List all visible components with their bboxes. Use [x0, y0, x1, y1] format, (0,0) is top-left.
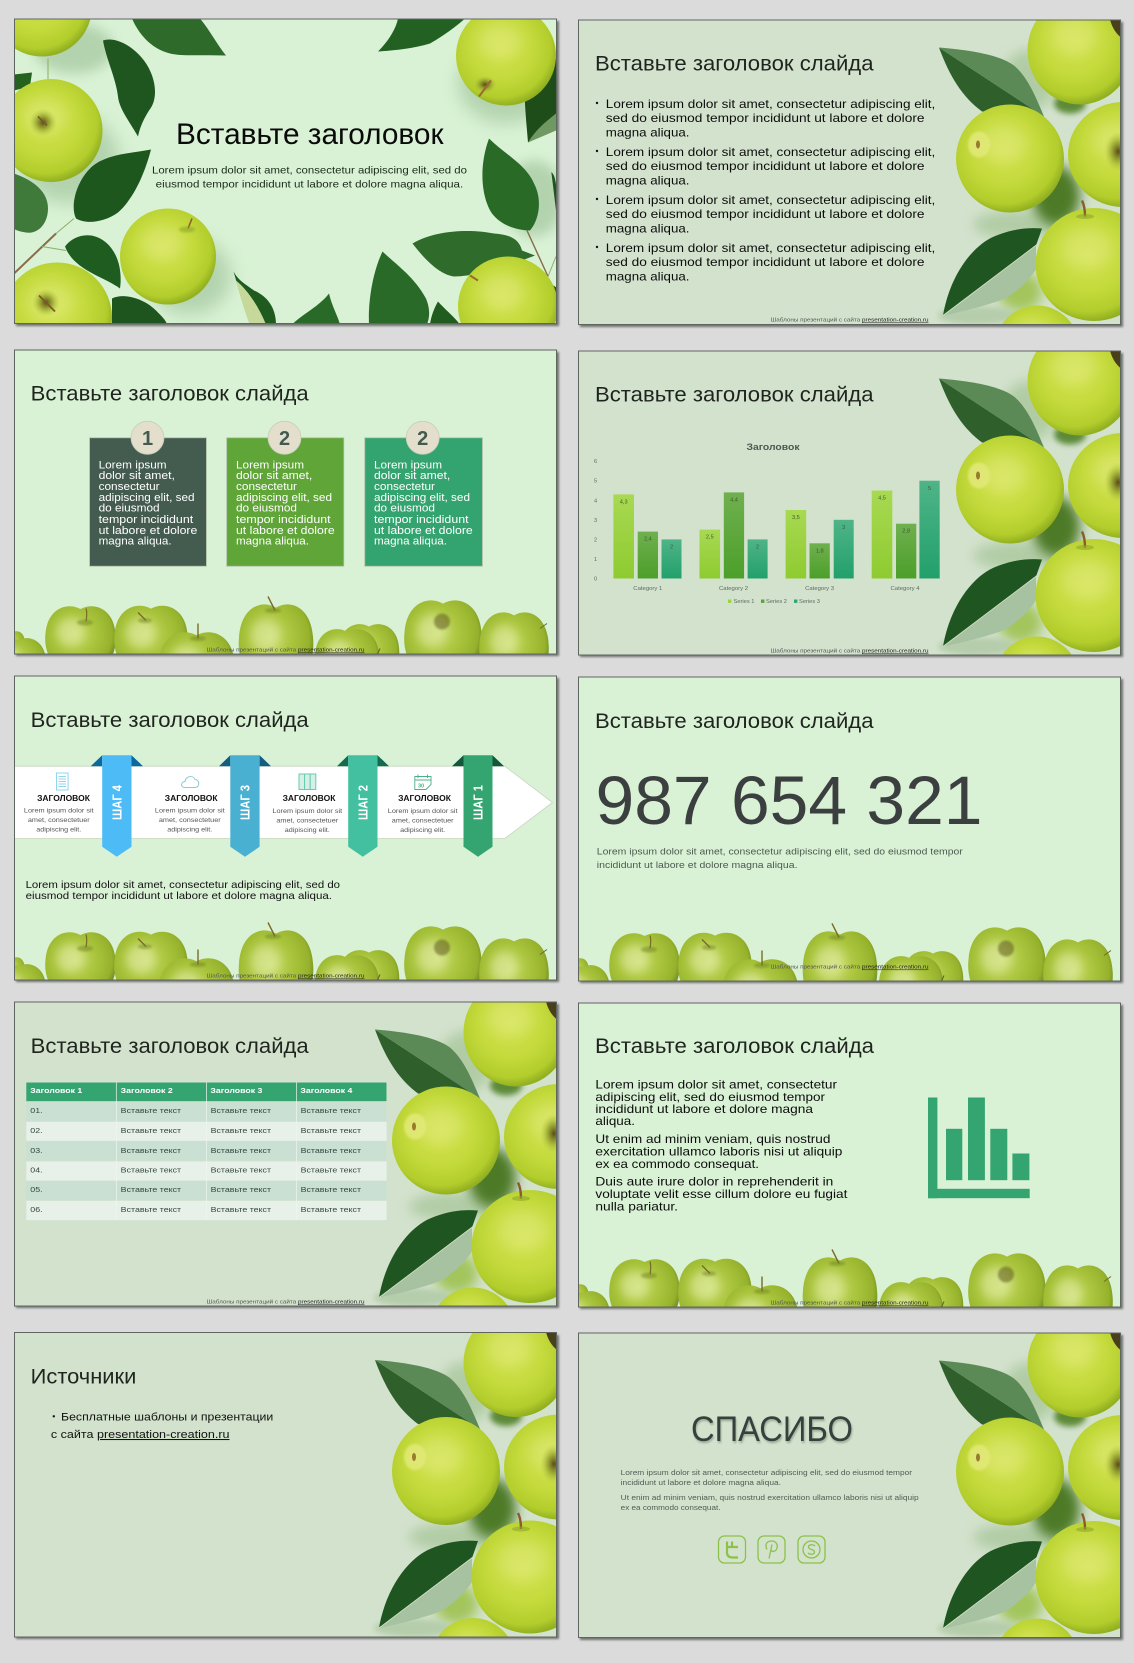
paragraph	[621, 1468, 919, 1512]
step text 3: Lorem ipsum dolor sit	[155, 808, 225, 814]
body text: Lorem ipsum dolor sit amet, consectetur	[595, 1078, 837, 1092]
step text 3: amet, consectetuer	[159, 817, 221, 824]
y axis labels	[594, 459, 597, 582]
title: Вставьте заголовок слайда	[31, 1034, 309, 1058]
paragraph	[597, 847, 964, 871]
bullet list: sed do eiusmod tempor incididunt ut labore et dolore	[606, 159, 925, 173]
source list: Бесплатные шаблоны и презентации	[61, 1411, 273, 1423]
body text: voluptate velit esse cillum dolore eu fugiat	[595, 1187, 848, 1201]
photo: row of apples	[554, 1250, 1113, 1360]
body text: exercitation ullamco laboris nisi ut aliquip	[595, 1144, 843, 1158]
source list: с сайта presentation-creation.ru	[51, 1429, 230, 1441]
table body: 05.	[30, 1185, 43, 1194]
photo: apples and leaves	[374, 978, 614, 1372]
bullet list: magna aliqua.	[606, 125, 689, 139]
step text 1: Lorem ipsum dolor sit	[388, 808, 458, 815]
card 1: do eiusmod	[99, 502, 160, 514]
photo: row of apples	[0, 922, 549, 1034]
step text 4: adipiscing elit.	[36, 826, 82, 834]
subtitle text: eiusmod tempor incididunt ut labore et dolore magna aliqua.	[156, 180, 463, 190]
card 1: magna aliqua.	[99, 536, 172, 548]
table body: Вставьте текст	[121, 1205, 182, 1214]
body text: Duis aute irure dolor in reprehenderit in	[595, 1174, 833, 1188]
footer credit	[206, 646, 364, 654]
paragraph: Lorem ipsum dolor sit amet, consectetur adipiscing elit, sed do eiusmod tempor	[597, 847, 964, 858]
table body: Вставьте текст	[121, 1146, 182, 1155]
ribbon: step 3	[219, 755, 271, 857]
title: Вставьте заголовок	[176, 118, 445, 151]
data labels: 1,8	[816, 548, 824, 554]
card 1: consectetur	[99, 481, 160, 493]
card 2: magna aliqua.	[236, 536, 309, 548]
data labels	[620, 486, 931, 554]
footer credit	[770, 648, 928, 654]
photo: row of apples	[0, 596, 549, 708]
table body: Вставьте текст	[211, 1185, 272, 1194]
legend: Series 3	[799, 599, 820, 605]
bullet list: Lorem ipsum dolor sit amet, consectetur adipiscing elit,	[606, 241, 935, 255]
data labels: 2	[756, 544, 759, 550]
title: Вставьте заголовок слайда	[595, 52, 874, 76]
y axis labels: 1	[594, 557, 597, 563]
bullet list: Lorem ipsum dolor sit amet, consectetur adipiscing elit,	[606, 145, 935, 159]
bullet list: magna aliqua.	[606, 173, 689, 187]
footer credit	[206, 1298, 364, 1306]
footer credit	[770, 1300, 928, 1306]
table header: Заголовок 2	[121, 1086, 173, 1095]
table body: Вставьте текст	[211, 1166, 272, 1174]
step text 2: ЗАГОЛОВОК	[283, 794, 336, 803]
icon: pinterest	[758, 1536, 785, 1563]
card 1: dolor sit amet,	[99, 470, 175, 482]
icon: twitter	[718, 1536, 746, 1563]
card 1: 1	[142, 428, 153, 450]
step text 1: adipiscing elit.	[400, 827, 446, 834]
table body: 01.	[30, 1106, 43, 1115]
card 3: dolor sit amet,	[374, 470, 450, 482]
panel: big number slide	[578, 676, 1121, 982]
paragraph: ex ea commodo consequat.	[621, 1503, 721, 1512]
data labels: 4,3	[620, 500, 628, 506]
bullet list: Lorem ipsum dolor sit amet, consectetur adipiscing elit,	[606, 193, 935, 207]
ribbon: step 4: ШАГ 4	[110, 784, 124, 820]
icon: document	[56, 773, 68, 790]
body text: incididunt ut labore et dolore magna	[595, 1102, 813, 1116]
card 2: consectetur	[236, 481, 297, 493]
step text 4	[24, 794, 94, 834]
photo: row of apples	[554, 924, 1113, 1034]
data labels: 2	[670, 544, 673, 550]
panel: bar chart slide	[578, 350, 1121, 656]
photo: apples and leaves	[374, 1309, 614, 1663]
caption text: eiusmod tempor incididunt ut labore et dolore magna aliqua.	[26, 891, 332, 902]
table body: Вставьте текст	[301, 1185, 362, 1194]
step text 3: ЗАГОЛОВОК	[165, 794, 219, 803]
table body: Вставьте текст	[121, 1126, 182, 1135]
footer credit	[206, 972, 364, 980]
table body: Вставьте текст	[301, 1146, 362, 1155]
subtitle text: Lorem ipsum dolor sit amet, consectetur adipiscing elit, sed do	[152, 166, 467, 176]
photo: apples and leaves	[938, 1310, 1134, 1663]
category labels	[633, 586, 920, 592]
icon: calendar: 30	[418, 784, 424, 790]
caption text	[26, 880, 340, 902]
caption text: Lorem ipsum dolor sit amet, consectetur adipiscing elit, sed do	[26, 880, 340, 891]
series 3 bars	[662, 481, 940, 578]
ribbon: step 1: ШАГ 1	[470, 785, 486, 820]
card 2: do eiusmod	[236, 502, 297, 514]
table body	[30, 1106, 362, 1214]
panel: thank you slide	[578, 1332, 1121, 1638]
card 3: 2	[417, 428, 428, 450]
table body: Вставьте текст	[121, 1106, 182, 1115]
body text: Ut enim ad minim veniam, quis nostrud	[595, 1132, 830, 1146]
table body: Вставьте текст	[301, 1106, 362, 1115]
body text: adipiscing elit, sed do eiusmod tempor	[595, 1090, 825, 1104]
ribbon: step 3: ШАГ 3	[238, 785, 252, 820]
card 3: ut labore et dolore	[374, 525, 473, 537]
table body: Вставьте текст	[301, 1166, 362, 1174]
y axis labels: 3	[594, 518, 597, 524]
table body: 02.	[30, 1126, 43, 1135]
data labels: 3	[842, 525, 845, 531]
ribbon: step 2: ШАГ 2	[356, 785, 370, 820]
body text	[595, 1078, 848, 1214]
panel: three cards slide	[14, 350, 557, 654]
card 2: Lorem ipsum	[236, 460, 304, 472]
card 3: magna aliqua.	[374, 536, 447, 548]
footer credit	[770, 964, 928, 970]
table body: Вставьте текст	[301, 1205, 362, 1214]
y axis labels: 2	[594, 537, 597, 543]
category labels: Category 2	[719, 586, 748, 592]
footer credit	[770, 316, 928, 324]
legend: Series 2	[766, 599, 787, 605]
step text 2: Lorem ipsum dolor sit	[272, 808, 343, 815]
icon: cloud	[182, 777, 199, 788]
body text: nulla pariatur.	[595, 1200, 678, 1214]
table header: Заголовок 1	[30, 1086, 83, 1095]
step text 3: adipiscing elit.	[167, 826, 213, 834]
series 2 bars	[638, 492, 916, 578]
card 2: adipiscing elit, sed	[236, 492, 332, 504]
table body: Вставьте текст	[211, 1146, 272, 1155]
table header: Заголовок 4	[300, 1086, 353, 1095]
card 2: dolor sit amet,	[236, 470, 312, 482]
y axis labels: 6	[594, 459, 597, 465]
step text 2: amet, consectetuer	[276, 818, 338, 824]
bullet list	[596, 97, 935, 283]
body text: ex ea commodo consequat.	[595, 1157, 759, 1171]
chart title: Заголовок	[746, 442, 800, 452]
photo: apples and leaves	[938, 0, 1134, 389]
step text 2	[272, 794, 343, 834]
table header: Заголовок 3	[210, 1086, 262, 1095]
data labels: 4,4	[730, 498, 738, 504]
panel: table slide	[14, 1002, 557, 1306]
paragraph: Ut enim ad minim veniam, quis nostrud exercitation ullamco laboris nisi ut aliquip	[621, 1493, 919, 1502]
subtitle text	[152, 166, 467, 190]
data labels: 2,4	[644, 536, 652, 542]
arrow band	[14, 766, 552, 838]
table body: Вставьте текст	[211, 1205, 272, 1214]
icon: skype	[798, 1536, 825, 1563]
card 1: Lorem ipsum	[99, 460, 167, 472]
icon: calendar	[415, 774, 431, 790]
bar chart	[594, 442, 940, 605]
card 2: tempor incididunt	[236, 514, 331, 526]
card 2: 2	[279, 428, 290, 450]
data labels: 4,5	[878, 496, 886, 502]
card 3	[365, 421, 482, 566]
heading: СПАСИБО	[691, 1409, 853, 1449]
paragraph: incididunt ut labore et dolore magna aliqua.	[621, 1478, 781, 1487]
big number: 987 654 321	[596, 762, 983, 839]
icon: bar chart	[928, 1098, 1030, 1198]
step text 1	[388, 794, 458, 834]
y axis labels: 0	[594, 576, 597, 582]
step text 4: amet, consectetuer	[28, 817, 90, 824]
y axis labels: 5	[594, 479, 597, 485]
source list	[51, 1411, 273, 1441]
bullet list: sed do eiusmod tempor incididunt ut labore et dolore	[606, 255, 925, 269]
ribbon: step 1	[452, 755, 504, 857]
step text 4: Lorem ipsum dolor sit	[24, 808, 94, 814]
table body: 04.	[30, 1166, 43, 1174]
step text 1: amet, consectetuer	[392, 818, 454, 824]
title: Вставьте заголовок слайда	[31, 708, 309, 732]
card 3: tempor incididunt	[374, 514, 469, 526]
data labels: 2,8	[902, 528, 910, 534]
legend	[728, 599, 820, 605]
table body: 06.	[30, 1205, 43, 1214]
body text: aliqua.	[595, 1114, 635, 1128]
table header	[30, 1086, 353, 1095]
category labels: Category 4	[890, 586, 920, 592]
card 3: do eiusmod	[374, 502, 435, 514]
paragraph: incididunt ut labore et dolore magna aliqua.	[597, 860, 797, 871]
panel: text and icon slide	[578, 1002, 1121, 1308]
bullet list: Lorem ipsum dolor sit amet, consectetur adipiscing elit,	[606, 97, 935, 111]
series 1 bars	[613, 490, 892, 578]
card 3: adipiscing elit, sed	[374, 492, 470, 504]
photo: apples and leaves	[938, 328, 1134, 720]
table body: Вставьте текст	[211, 1126, 272, 1135]
bullet list: sed do eiusmod tempor incididunt ut labore et dolore	[606, 111, 925, 125]
step text 2: adipiscing elit.	[285, 827, 330, 834]
panel: sources slide	[14, 1332, 557, 1638]
category labels: Category 3	[805, 586, 834, 592]
step text 3	[155, 794, 225, 834]
bullet list: magna aliqua.	[606, 269, 689, 283]
ribbon: step 4	[91, 755, 143, 857]
card 3: Lorem ipsum	[374, 460, 442, 472]
step text 1: ЗАГОЛОВОК	[398, 794, 452, 803]
card 1: adipiscing elit, sed	[99, 492, 195, 504]
paragraph: Lorem ipsum dolor sit amet, consectetur adipiscing elit, sed do eiusmod tempor	[621, 1468, 913, 1477]
category labels: Category 1	[633, 586, 662, 592]
data labels: 5	[928, 486, 931, 492]
bullet list: magna aliqua.	[606, 221, 689, 235]
title: Источники	[31, 1365, 136, 1389]
card 2: ut labore et dolore	[236, 525, 335, 537]
step text 4: ЗАГОЛОВОК	[37, 794, 91, 803]
title: Вставьте заголовок слайда	[31, 382, 309, 406]
title: Вставьте заголовок слайда	[595, 382, 874, 406]
panel: timeline steps slide	[14, 676, 557, 980]
icon: binders	[299, 774, 316, 790]
table body: Вставьте текст	[211, 1106, 272, 1115]
bullet list: sed do eiusmod tempor incididunt ut labore et dolore	[606, 207, 925, 221]
data labels: 2,5	[706, 534, 714, 540]
title: Вставьте заголовок слайда	[595, 709, 874, 733]
panel: title slide	[14, 18, 557, 324]
ribbon: step 2	[337, 755, 389, 857]
table body: 03.	[30, 1146, 43, 1155]
panel: bullet list slide	[578, 20, 1121, 325]
card 2	[227, 421, 344, 566]
card 3: consectetur	[374, 481, 435, 493]
data labels: 3,5	[792, 515, 800, 521]
table	[26, 1082, 387, 1220]
legend: Series 1	[734, 599, 754, 605]
card 1: ut labore et dolore	[99, 525, 197, 537]
table body: Вставьте текст	[121, 1166, 182, 1174]
card 1	[90, 421, 206, 566]
table rows	[26, 1082, 387, 1220]
table body: Вставьте текст	[121, 1185, 182, 1194]
card 1: tempor incididunt	[99, 514, 193, 526]
table body: Вставьте текст	[301, 1126, 362, 1135]
title: Вставьте заголовок слайда	[595, 1034, 874, 1058]
y axis labels: 4	[594, 498, 597, 504]
